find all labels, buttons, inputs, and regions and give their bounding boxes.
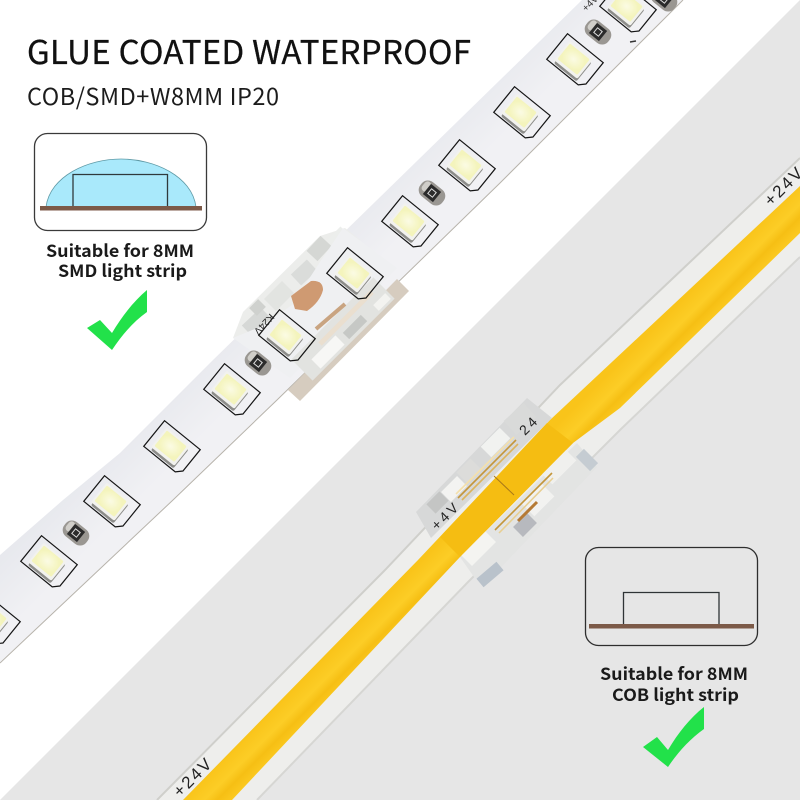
resistors upper [415,0,681,209]
yellow COB phosphor [183,186,800,800]
strip base [0,0,683,663]
gold contact pins lower [495,473,553,533]
printed label: +24V lower: +24V [169,753,217,800]
upper clamp block [416,398,552,538]
subtitle: COB/SMD+W8MM IP20 [27,78,279,112]
frame [34,134,206,230]
yellow strip inside the connector [440,423,573,557]
label: COB suitability [600,660,748,706]
connector polarity prints: +4V [428,498,463,533]
frame [586,548,758,646]
SMD light strip [0,0,683,663]
label: SMD suitability: SMD light strip [58,257,187,282]
connector resistor [241,347,275,379]
label: SMD suitability [46,237,194,282]
diagram: COB [586,548,758,646]
connector top plate [233,228,397,378]
label: COB suitability: COB light strip [612,681,739,706]
glue dome [46,159,196,207]
COB connector: 24 [516,412,542,438]
gold contact pins upper [456,437,518,500]
connector LED lower [259,310,315,364]
copper contact [291,281,323,311]
COB light strip [157,158,800,800]
diagram: SMD glue coated [34,134,206,230]
clear lobes, upper left side [247,230,344,331]
clear silicone band [157,158,800,800]
LED row upper [382,0,656,250]
copper pin [316,304,345,329]
LED row lower [0,364,260,647]
resistor lower [59,517,93,549]
strip lower edge [0,0,683,663]
SMD connector [233,228,409,401]
label: COB suitability: Suitable for 8MM [600,660,748,685]
clear lobes, lower right side [302,288,388,370]
base bar [589,624,754,628]
strip profile [73,174,168,207]
strip profile [624,592,719,625]
seam between strips [494,476,514,495]
clear backing behind upper left lobes [233,228,360,340]
lower clamp block [460,443,597,582]
icon: green check SMD [87,290,147,350]
tan base plate [288,279,409,401]
COB connector [416,398,597,583]
strip minus mark [630,41,636,42]
label: SMD suitability: Suitable for 8MM [46,237,194,262]
title: GLUE COATED WATERPROOF [27,26,471,74]
connector LED upper [327,248,383,302]
icon: green check COB [643,707,704,767]
connector print: K24V [251,311,276,337]
base bar [40,206,202,210]
